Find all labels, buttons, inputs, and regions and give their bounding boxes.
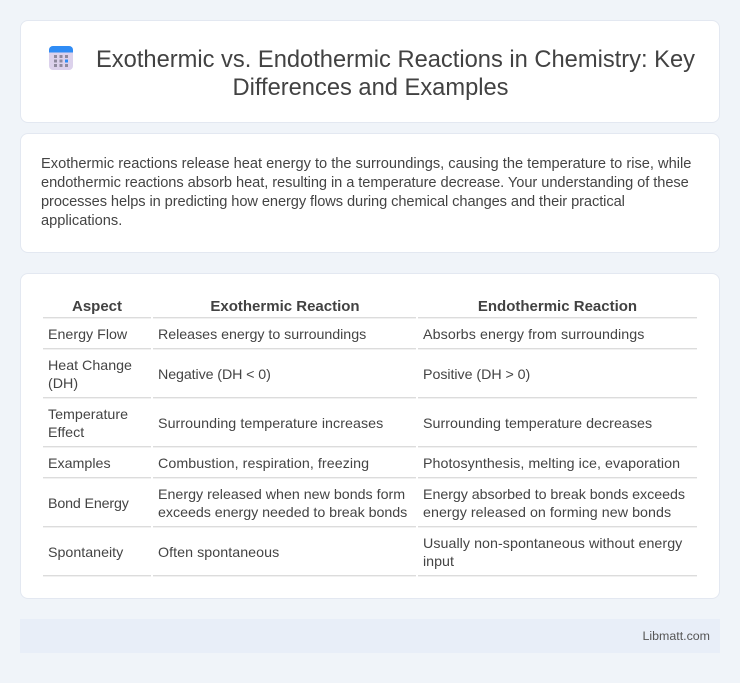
column headers: Aspect (72, 298, 122, 315)
header panel (20, 20, 720, 123)
row: temperature effect (48, 407, 652, 441)
row: bond energy: exceeds energy needed to break bonds (158, 505, 407, 521)
row: heat change (48, 358, 530, 392)
row: temperature effect: Effect (48, 425, 84, 441)
title: Differences and Examples (232, 75, 509, 101)
intro panel (20, 133, 720, 253)
intro text: applications. (41, 213, 122, 229)
row: energy flow: Absorbs energy from surroundings (423, 327, 644, 343)
row: bond energy: Bond Energy (48, 496, 129, 512)
footer bar (20, 619, 720, 653)
row: spontaneity: Spontaneity (48, 545, 123, 561)
intro text: processes helps in predicting how energy flows during chemical changes and their practical (41, 194, 625, 210)
row: temperature effect: Temperature (48, 407, 128, 423)
row: heat change: Negative (DH < 0) (158, 367, 271, 383)
column headers: Exothermic Reaction (210, 298, 360, 315)
column headers: Endothermic Reaction (478, 298, 637, 315)
row: bond energy: Energy released when new bonds form (158, 487, 405, 503)
row: bond energy (48, 487, 685, 521)
row: examples: Combustion, respiration, freezing (158, 456, 369, 472)
row: spontaneity: Usually non-spontaneous without energy (423, 536, 682, 552)
comparison table (43, 298, 697, 577)
intro text: Exothermic reactions release heat energy to the surroundings, causing the temperature to rise, while (41, 156, 691, 172)
intro text: endothermic reactions absorb heat, resulting in a temperature decrease. Your understanding of these (41, 175, 689, 191)
row: energy flow: Energy Flow (48, 327, 127, 343)
row: heat change: Positive (DH > 0) (423, 367, 530, 383)
row: spontaneity: Often spontaneous (158, 545, 279, 561)
row: spontaneity (48, 536, 682, 570)
intro text (41, 156, 691, 229)
icon: calendar (49, 46, 73, 70)
row: bond energy: energy released on forming new bonds (423, 505, 671, 521)
footer credit: Libmatt.com (643, 629, 710, 643)
row: energy flow (48, 327, 644, 343)
row: temperature effect: Surrounding temperature increases (158, 416, 383, 432)
row: heat change: Heat Change (48, 358, 132, 374)
comparison table panel (20, 273, 720, 599)
row: heat change: (DH) (48, 376, 78, 392)
row: temperature effect: Surrounding temperature decreases (423, 416, 652, 432)
row: bond energy: Energy absorbed to break bonds exceeds (423, 487, 685, 503)
row: examples (48, 456, 680, 472)
title (96, 47, 695, 101)
title: Exothermic vs. Endothermic Reactions in Chemistry: Key (96, 47, 695, 73)
row: spontaneity: input (423, 554, 454, 570)
row: examples: Examples (48, 456, 111, 472)
column headers (72, 298, 637, 315)
row: examples: Photosynthesis, melting ice, evaporation (423, 456, 680, 472)
row: energy flow: Releases energy to surroundings (158, 327, 366, 343)
